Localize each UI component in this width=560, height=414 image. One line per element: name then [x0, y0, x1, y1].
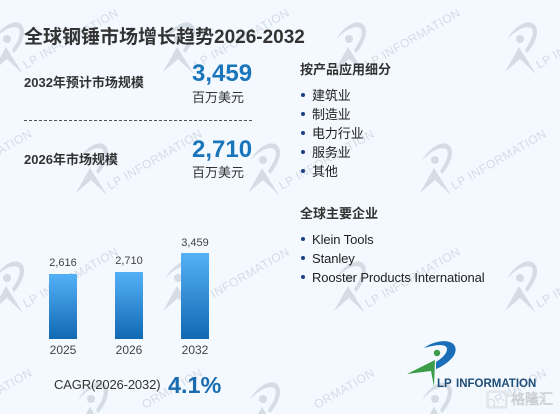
unit: 2026: 百万美元 [192, 165, 244, 180]
icon: LP Information logo: INFORMATION [456, 378, 536, 390]
list: key companies [301, 232, 485, 285]
bar: 2026: 2026 [116, 343, 142, 357]
watermark background: LP INFORMATION [362, 245, 463, 311]
bar: 2032: 3,459 [181, 237, 209, 249]
bar: 2026 [115, 255, 143, 357]
label: 2032 forecast market size: 2032年预计市场规模 [24, 75, 144, 90]
watermark name: 格隆汇 [511, 391, 553, 407]
CAGR value: 4.1% [168, 372, 221, 398]
value: 2026 market size: 2,710 [192, 136, 252, 163]
watermark background: ORMATION [140, 366, 205, 412]
list: product applications: 电力行业 [312, 126, 364, 141]
watermark background: LP INFORMATION [192, 245, 292, 311]
watermark background: LP INFORMATION [20, 245, 121, 311]
watermark background: LP INFORMATION [192, 6, 292, 72]
bar chart [49, 237, 209, 357]
value: 2032 market size: 3,459 [192, 60, 252, 87]
list: product applications: 建筑业 [312, 88, 351, 103]
icon: LP Information logo [407, 341, 536, 390]
watermark background: LP INFORMATION [276, 127, 377, 193]
list: product applications: 制造业 [312, 107, 351, 122]
callout: CAGR [54, 372, 221, 398]
watermark background: ORMATION [484, 366, 549, 412]
panel: market size [24, 60, 252, 180]
label: 2026 market size: 2026年市场规模 [24, 152, 118, 167]
icon: Gelonghui watermark [486, 390, 553, 408]
bar: 2032: 2032 [182, 343, 208, 357]
list: key companies: Klein Tools [312, 232, 374, 247]
watermark background: LP INFORMATION [362, 6, 463, 72]
bar: 2026: 2,710 [115, 255, 143, 267]
list: product applications: 服务业 [312, 145, 351, 160]
heading: key companies: 全球主要企业 [300, 206, 378, 221]
list: key companies: Rooster Products International [312, 270, 485, 285]
heading: product application segments: 按产品应用细分 [300, 62, 391, 77]
watermark background: ORMATION [312, 366, 377, 412]
bar: 2032 [181, 237, 209, 357]
watermark glyph box [487, 391, 507, 408]
unit: 2032: 百万美元 [192, 90, 244, 105]
bar: 2025: 2,616 [49, 257, 77, 269]
bar: 2025 [49, 257, 77, 357]
icon: LP Information logo: LP [437, 378, 452, 390]
watermark background: LP INFORMATION [20, 6, 121, 72]
list: product applications [301, 88, 364, 179]
bar: 2025: 2025 [50, 343, 76, 357]
watermark background: LP INFORMATION [104, 127, 205, 193]
title: 全球钢锤市场增长趋势2026-2032 [24, 27, 305, 48]
CAGR label: CAGR(2026-2032) [54, 377, 160, 392]
list: key companies: Stanley [312, 251, 355, 266]
list: product applications: 其他 [312, 164, 338, 179]
watermark background: LP INFORMATION [448, 127, 549, 193]
